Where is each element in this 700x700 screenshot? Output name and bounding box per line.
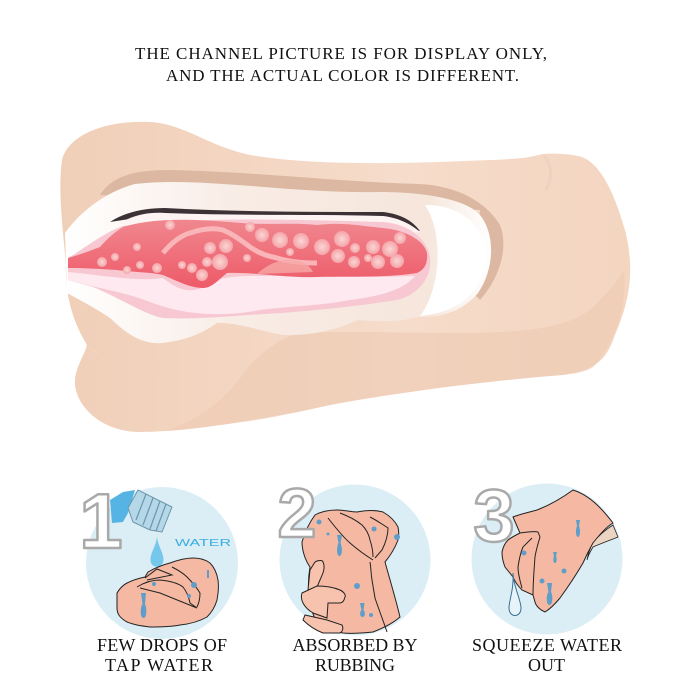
top crease	[544, 156, 551, 190]
droplets	[316, 520, 400, 617]
detail lines	[328, 513, 388, 632]
textured bumps	[97, 220, 406, 281]
step 3: squeeze	[472, 474, 622, 675]
band	[587, 525, 618, 560]
outer white wall	[65, 182, 491, 343]
detail lines	[137, 567, 200, 608]
caption: ABSORBED BY	[292, 635, 418, 655]
detail lines	[518, 532, 540, 595]
lower lip crease	[87, 345, 160, 368]
falling drop	[509, 573, 521, 616]
upper cut shadow	[100, 170, 503, 300]
product cross-section illustration	[60, 122, 630, 432]
water drop	[150, 535, 164, 567]
blue circle	[280, 484, 430, 636]
sleeve illustration	[302, 510, 400, 633]
caption: FEW DROPS OF	[97, 635, 227, 655]
bottle	[110, 490, 172, 532]
red inner channel	[68, 220, 427, 288]
title: AND THE ACTUAL COLOR IS DIFFERENT.	[166, 66, 519, 85]
droplets	[522, 520, 580, 605]
caption: RUBBING	[315, 655, 395, 675]
white rim above lining	[118, 213, 420, 234]
caption	[97, 635, 227, 675]
hand fingers	[301, 560, 345, 633]
sleeve illustration	[117, 558, 218, 627]
caption: TAP WATER	[105, 655, 213, 675]
droplets	[141, 570, 209, 618]
number 3: 3	[473, 474, 515, 557]
title	[135, 44, 547, 85]
blue circle	[86, 487, 238, 639]
dark interior gap	[110, 208, 420, 231]
step 2: rubbing	[278, 474, 430, 675]
bright dome tip	[420, 205, 486, 316]
white lower wall highlight	[68, 272, 415, 314]
product outer body	[60, 122, 630, 432]
lower lobe	[257, 260, 313, 274]
label: water: WATER	[175, 537, 232, 549]
caption: SQUEEZE WATER	[472, 635, 622, 655]
title: THE CHANNEL PICTURE IS FOR DISPLAY ONLY,	[135, 44, 547, 63]
number 1: 1	[79, 477, 123, 565]
body shadow beneath	[165, 270, 625, 431]
number 2: 2	[278, 474, 316, 552]
caption	[292, 635, 418, 675]
raised ridge	[163, 229, 317, 263]
caption	[472, 635, 622, 675]
caption: OUT	[528, 655, 565, 675]
blue circle	[472, 484, 622, 634]
step 1: tap water	[79, 477, 238, 675]
pink lining	[68, 220, 430, 318]
sleeve illustration	[502, 490, 613, 612]
